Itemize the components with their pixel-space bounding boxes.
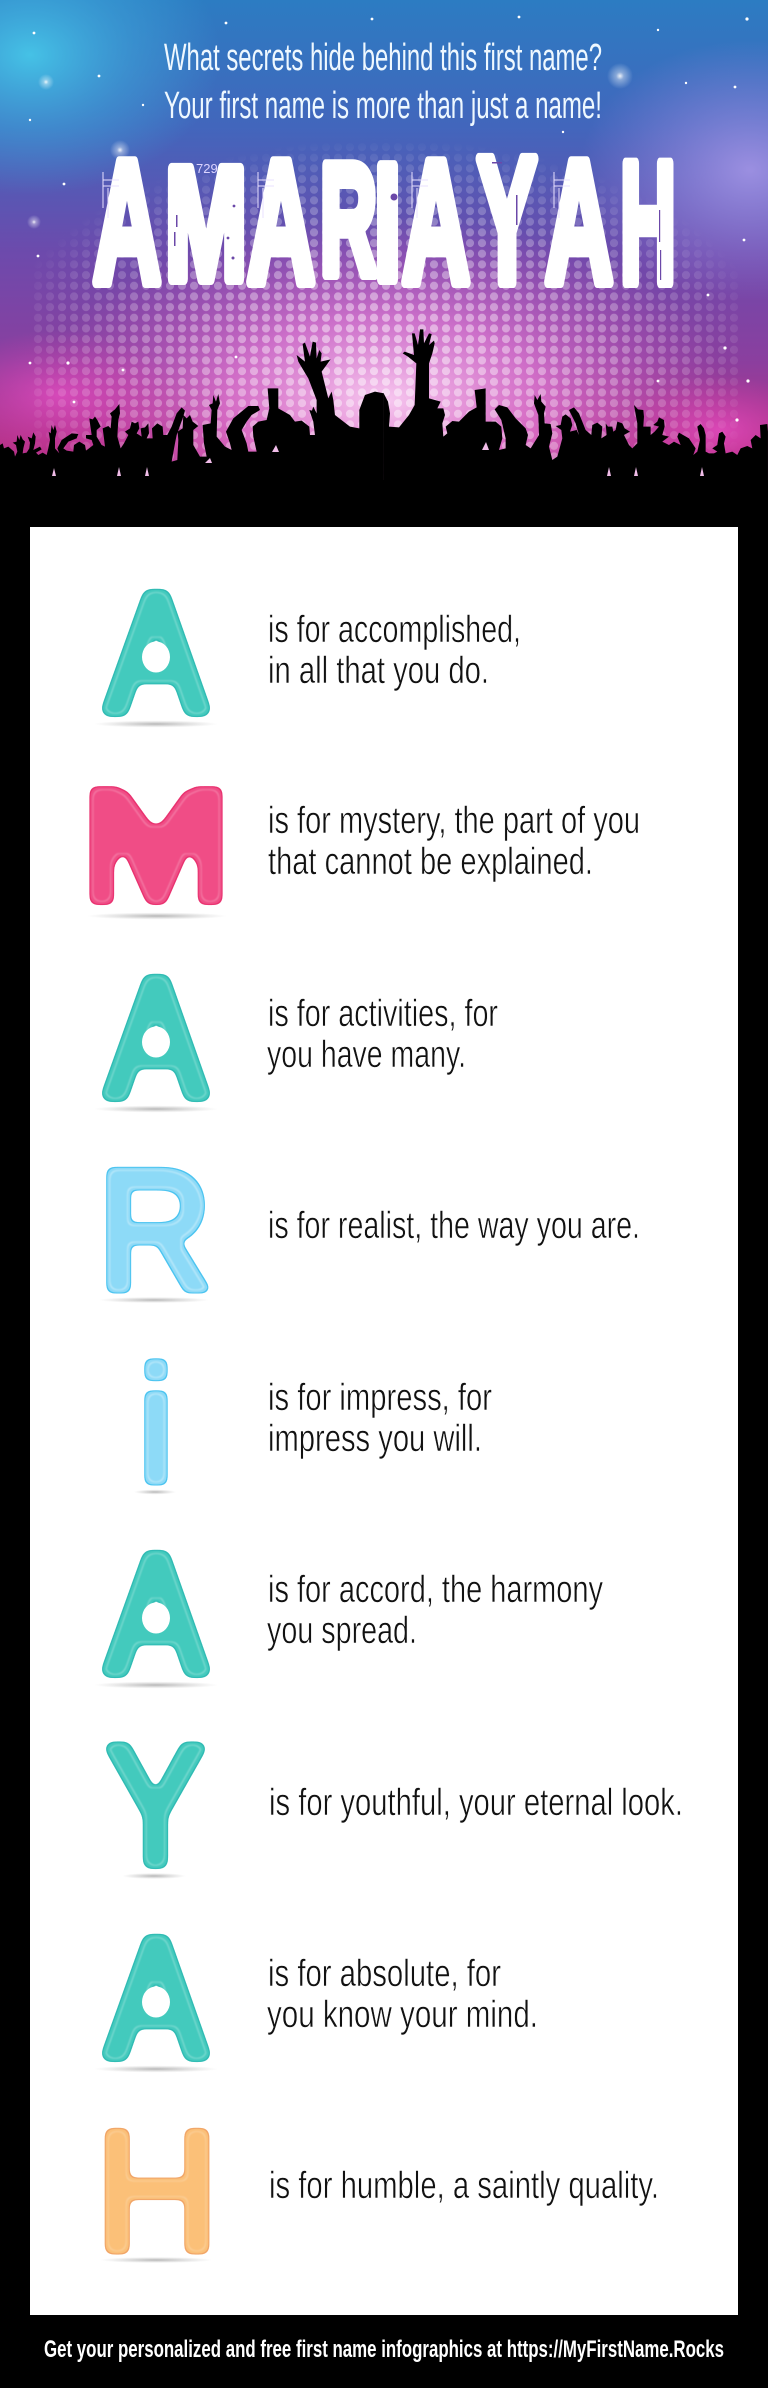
text: mystery [268,800,640,883]
icon: letter A: A [108,946,204,1129]
text: accomplished [268,609,521,692]
text: impress: is for impress, for [268,1377,492,1419]
text: mystery: that cannot be explained. [268,841,593,883]
text: impress: impress you will. [268,1418,482,1460]
row: M mystery [79,755,640,935]
row: Y youthful [108,1713,683,1897]
name title: R [320,132,377,308]
light gaps in crowd [52,442,704,476]
name title: A [402,124,470,319]
row: A accord [94,1522,603,1705]
text: humble: is for humble, a saintly quality. [269,2165,659,2207]
crowd silhouette [0,329,768,528]
row: H humble [95,2096,659,2287]
icon: letter M: M [79,755,233,935]
name title: Y [477,120,537,320]
text: activities: is for activities, for [268,993,498,1035]
name title: A [247,124,315,319]
text: activities [267,993,498,1076]
name title: A [545,124,613,319]
crowd left half [0,342,384,528]
row: A absolute [94,1906,538,2089]
name title: I [374,131,401,314]
text: impress [268,1377,492,1460]
sparkles [27,16,750,422]
text: accord [267,1569,603,1652]
white content panel [30,527,738,2315]
icon: letter H: H [95,2096,219,2287]
text: accomplished: in all that you do. [268,650,489,692]
text: accomplished: is for accomplished, [268,609,521,651]
dot matrix lights [34,149,738,460]
header banner [0,0,768,480]
intro text [164,37,602,127]
name title [93,120,676,320]
icon: letter A: A [108,1522,204,1705]
icon: letter A: A [108,1906,204,2089]
stage background glow [0,0,768,585]
text: absolute: is for absolute, for [268,1953,501,1995]
row: A accomplished [94,561,521,744]
icon: letter R: R [99,1137,211,1324]
text: accord: is for accord, the harmony [268,1569,603,1611]
name title: 729 [196,161,218,176]
text: realist: is for realist, the way you are. [268,1205,640,1247]
row: A activities [94,946,498,1129]
text: accord: you spread. [267,1610,417,1652]
name title: A [93,124,161,319]
row: i impress [134,1333,492,1516]
crowd right half [384,329,768,528]
header banner: H [620,127,676,319]
name title: M [165,134,247,313]
icon: letter A: A [108,561,204,744]
text: absolute [267,1953,538,2036]
text: mystery: is for mystery, the part of you [268,800,640,842]
text: absolute: you know your mind. [267,1994,538,2036]
icon: letter Y: Y [108,1713,203,1897]
icon: letter i: i [138,1333,174,1516]
row: R realist [99,1137,640,1324]
text: activities: you have many. [267,1034,466,1076]
black stage base [0,480,768,528]
